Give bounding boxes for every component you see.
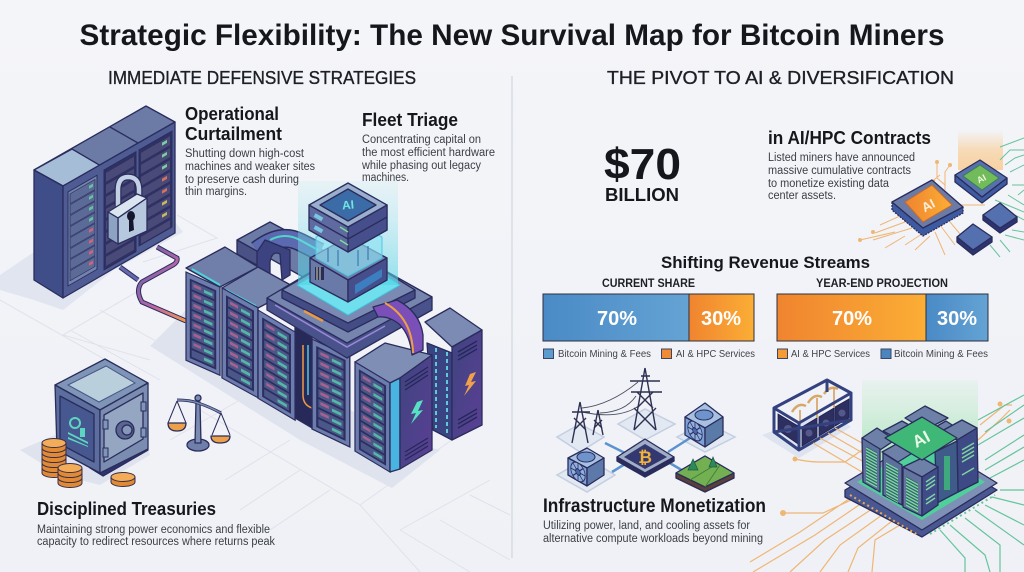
back tiles	[905, 406, 948, 430]
text: fleet triage: the most efficient hardware	[362, 147, 495, 159]
floor grid and shadows	[0, 215, 510, 572]
text: operational curtailment: Curtailment	[185, 124, 282, 144]
AI unit upper: AI	[341, 198, 355, 212]
text: infrastructure monetization: alternative compute workloads beyond mining	[543, 533, 763, 545]
land plot	[676, 456, 734, 492]
bar: current share: 30%	[701, 308, 741, 330]
stat: 70 billion: $70	[604, 140, 681, 189]
text: operational curtailment: Operational	[185, 104, 279, 124]
icon: locked server rack	[34, 106, 186, 321]
text: in AI/HPC contracts: Listed miners have announced	[768, 152, 915, 164]
icon: balance scales	[168, 395, 230, 451]
icon: mining rig frame	[762, 380, 851, 458]
text: in AI/HPC contracts	[768, 128, 931, 202]
racks front	[186, 272, 220, 375]
legend: year-end projection	[778, 349, 988, 360]
coin stacks	[42, 438, 135, 488]
text: infrastructure monetization	[543, 496, 766, 545]
text: operational curtailment	[185, 104, 315, 198]
platform	[845, 445, 997, 537]
text: fleet triage: Concentrating capital on	[362, 134, 481, 146]
center divider	[511, 76, 513, 558]
bar: year-end projection	[777, 294, 988, 341]
text: in AI/HPC contracts: massive cumulative contracts	[768, 165, 911, 177]
text: disciplined treasuries: capacity to redirect resources where returns peak	[37, 536, 275, 548]
central platform	[267, 250, 432, 358]
bar: year-end projection: 70%	[832, 308, 872, 330]
text: fleet triage: while phasing out legacy	[361, 160, 481, 172]
back block and blue cable	[237, 222, 345, 282]
server towers: AI	[909, 427, 933, 452]
bar: year-end projection: 30%	[937, 308, 977, 330]
legend: year-end projection: AI & HPC Services	[791, 349, 870, 360]
text: infrastructure monetization: Utilizing power, land, and cooling assets for	[543, 520, 750, 532]
cooling cubes	[568, 403, 723, 486]
glow column	[298, 181, 398, 285]
text: in AI/HPC contracts: center assets.	[768, 190, 836, 202]
text: in AI/HPC contracts: in AI/HPC Contracts	[768, 128, 931, 148]
chart title: Shifting Revenue Streams	[661, 253, 870, 272]
panel: immediate defensive strategies	[0, 67, 510, 572]
icon: power, cooling and land network	[557, 368, 735, 492]
heading: immediate defensive strategies: IMMEDIATE DEFENSIVE STRATEGIES	[108, 67, 416, 88]
AI unit lower	[310, 237, 387, 302]
panel: the pivot to AI and diversification	[543, 67, 1024, 572]
icon: server cluster with upgraded AI unit	[186, 181, 482, 472]
bar: current share	[543, 294, 754, 341]
rack tops	[186, 247, 482, 440]
title: Strategic Flexibility: The New Survival Map for Bitcoin Miners	[80, 19, 944, 52]
legend: current share: AI & HPC Services	[676, 349, 755, 360]
text: fleet triage: machines.	[362, 172, 409, 184]
glass core	[316, 220, 382, 276]
text: fleet triage: Fleet Triage	[362, 110, 458, 130]
purple cable	[373, 300, 423, 355]
text: operational curtailment: to preserve cash during	[185, 174, 299, 186]
icon: safe with coins	[42, 359, 148, 488]
text: fleet triage	[361, 110, 495, 184]
transmission towers	[572, 368, 662, 443]
icon: AI chips with circuit traces: AI	[975, 172, 988, 185]
green glow	[862, 380, 978, 460]
chart: shifting revenue streams	[543, 253, 988, 360]
legend: current share: Bitcoin Mining & Fees	[558, 349, 651, 360]
text: disciplined treasuries: Maintaining strong power economics and flexible	[37, 524, 270, 536]
text: disciplined treasuries	[37, 499, 275, 548]
bar: current share: 70%	[597, 308, 637, 330]
current share label: CURRENT SHARE	[602, 278, 695, 290]
text: in AI/HPC contracts: to monetize existing data	[768, 178, 890, 190]
legend: current share	[544, 349, 755, 360]
legend: year-end projection: Bitcoin Mining & Fees	[894, 349, 988, 360]
AI unit upper	[309, 183, 387, 252]
bitcoin chip: ₿	[638, 448, 652, 467]
icon: padlock	[108, 177, 147, 244]
icon: AI chips with circuit traces: AI	[919, 196, 937, 215]
text: operational curtailment: Shutting down high-cost	[185, 148, 305, 160]
server towers	[862, 417, 978, 516]
icon: AI chips with circuit traces	[858, 130, 1024, 257]
text: infrastructure monetization: Infrastructure Monetization	[543, 496, 766, 517]
text: operational curtailment: thin margins.	[185, 186, 247, 198]
text: disciplined treasuries: Disciplined Treasuries	[37, 499, 216, 519]
front corner rack	[355, 343, 432, 472]
icon: AI data center on chip	[750, 380, 1024, 572]
bitcoin chip	[617, 439, 674, 477]
stat: 70 billion: BILLION	[605, 185, 679, 205]
heading: pivot to AI: THE PIVOT TO AI & DIVERSIFICATION	[607, 67, 954, 88]
text: operational curtailment: machines and weaker sites	[185, 161, 315, 173]
year-end projection label: YEAR-END PROJECTION	[816, 278, 948, 290]
